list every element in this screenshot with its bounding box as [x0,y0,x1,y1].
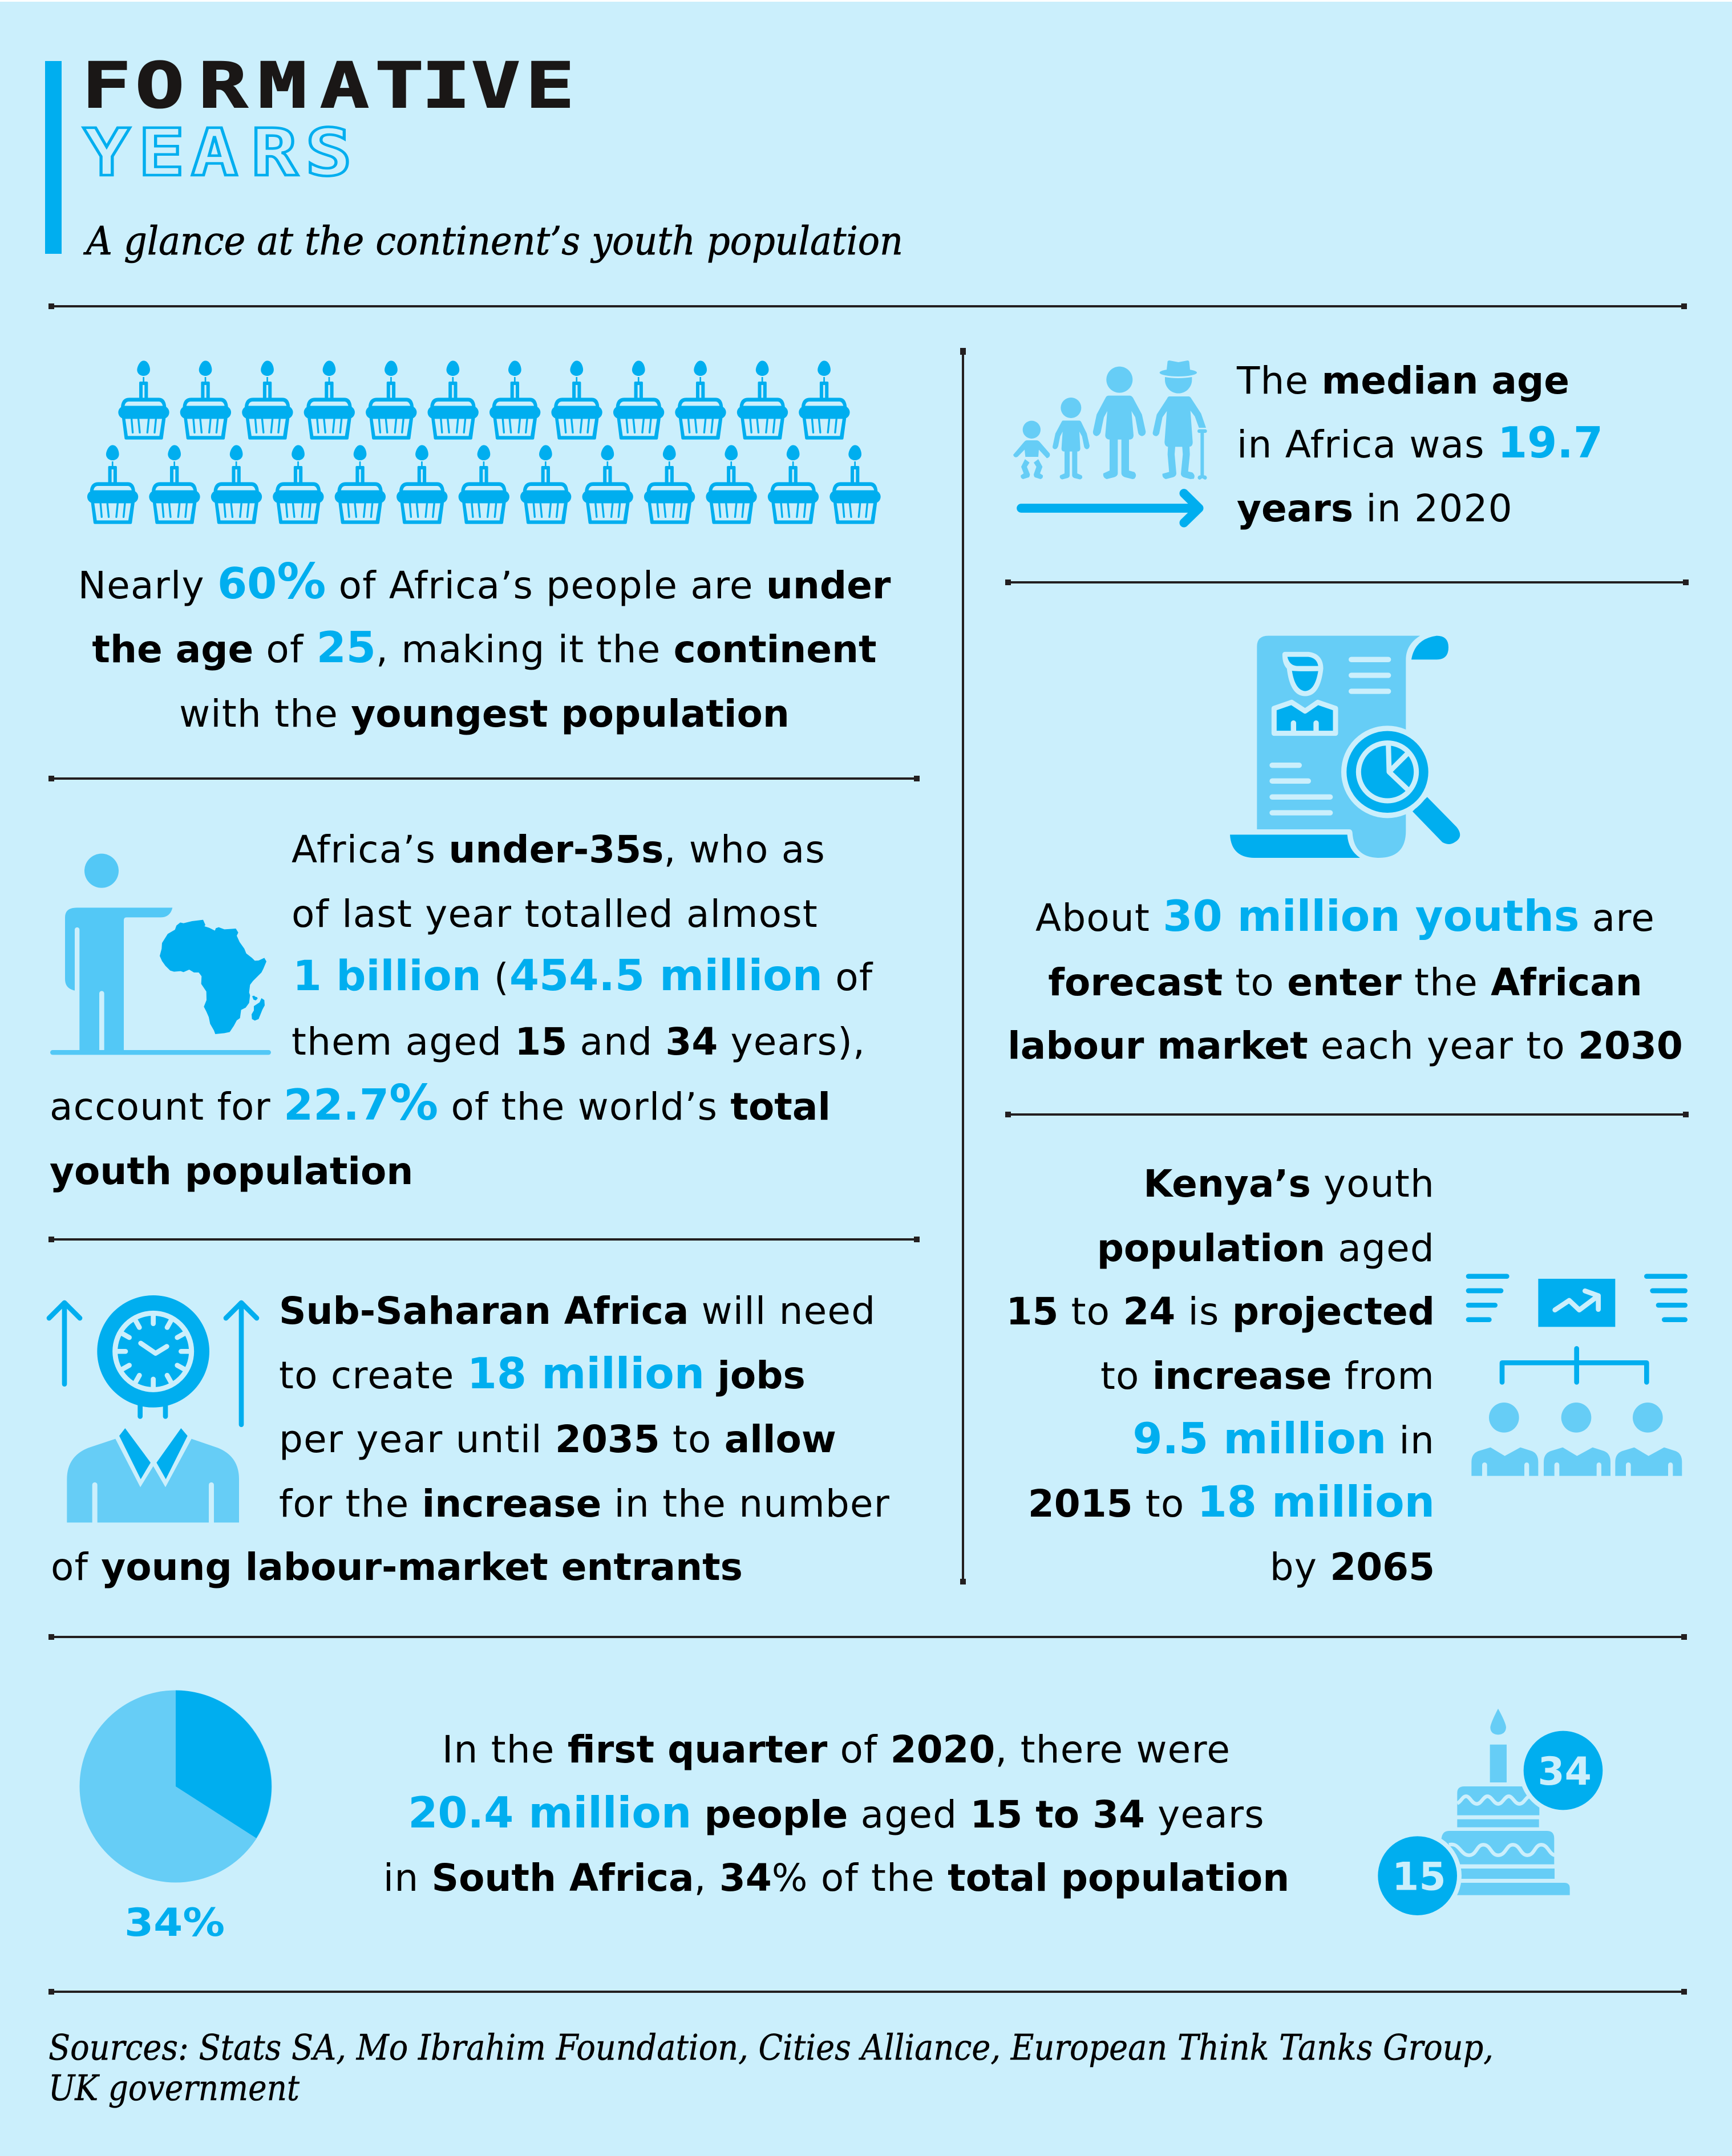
icon: clock-headed worker with rising arrows [49,1295,257,1522]
elder with hat and cane [1153,360,1207,480]
text: median age: in Africa was 19.7 [1237,418,1603,468]
baby [1013,421,1050,479]
text: under-35s: of last year totalled almost [292,892,818,936]
text: Kenya youth: 9.5 million in [1132,1413,1435,1464]
adult [1093,367,1146,479]
profile portrait [1274,654,1336,733]
sources: UK government [48,2067,300,2109]
text: under-35s: 1 billion (454.5 million of [293,950,873,1000]
icon: birthday cake with ages 15 and 34 [1373,1709,1607,1920]
text: 30 million youths: labour market each year to 2030 [1007,1024,1683,1068]
people [1471,1403,1682,1476]
text: sub-Saharan jobs: for the increase in the number [279,1482,890,1526]
sources [48,2027,1494,2109]
clock head [97,1295,209,1416]
page [1257,636,1420,858]
org connector [1502,1348,1646,1382]
pie label: 34% [124,1900,225,1946]
age badge 15: 15 [1392,1854,1446,1899]
text: under-35s: youth population [50,1149,413,1193]
icon: person pointing at Africa [50,854,271,1055]
torso with collar [67,1428,239,1522]
text: Kenya youth: by 2065 [1270,1545,1435,1589]
text: Kenya youth: population aged [1097,1226,1435,1270]
sources: Sources: Stats SA, Mo Ibrahim Foundation, Cities Alliance, European Think Tanks Group, [48,2027,1494,2068]
text: under-35s: Africa’s under-35s, who as [292,828,825,872]
text: sub-Saharan jobs [51,1289,890,1589]
text: sub-Saharan jobs: of young labour-market entrants [51,1545,743,1589]
text: median age: years in 2020 [1237,487,1513,530]
subtitle: A glance at the continent’s youth population [83,219,903,264]
title line: FORMATIVE: FORMATIVE [82,50,574,123]
text: sub-Saharan jobs: per year until 2035 to allow [279,1417,836,1461]
magnifier [1341,726,1460,844]
text: Kenya youth: Kenya’s youth [1143,1162,1435,1206]
text: median age: The median age [1236,359,1569,403]
icon: document with magnifying glass [1230,636,1460,858]
text: Kenya youth [1006,1162,1435,1589]
accent bar [45,61,62,254]
text: under-25 population: with the youngest population [179,692,790,736]
rules [48,303,1689,1995]
map of Africa [160,920,266,1034]
text: South Africa [383,1728,1289,1900]
arrow: age progression [1021,493,1199,523]
text: Kenya youth: to increase from [1100,1354,1435,1398]
text: under-35s: account for 22.7% of the world’s total [50,1075,831,1132]
text: under-25 population [78,553,891,736]
text: South Africa: in South Africa, 34% of the total population [383,1856,1289,1900]
arrow: up left [49,1303,80,1384]
side bars [1468,1276,1685,1320]
title [82,50,574,191]
icon: ages of life with arrow [1013,360,1207,523]
text: under-25 population: the age of 25, making it the continent [92,622,877,672]
text: under-35s [50,828,873,1193]
pie chart: 34% [80,1691,272,1946]
text: South Africa: In the first quarter of 2020, there were [442,1728,1231,1772]
icon: team with growth chart [1468,1276,1685,1476]
text: median age [1236,359,1603,530]
text: Kenya youth: 2015 to 18 million [1028,1477,1435,1527]
icon: rows of birthday cupcakes [87,360,881,524]
age badge 34: 34 [1537,1749,1592,1794]
chart panel [1538,1279,1615,1327]
title line: YEARS: YEARS [83,115,352,191]
text: sub-Saharan jobs: to create 18 million jobs [279,1348,806,1399]
text: under-35s: them aged 15 and 34 years), [292,1020,865,1064]
text: under-25 population: Nearly 60% of Africa’s people are under [78,553,891,610]
arrow: up right [226,1303,257,1425]
text: 30 million youths [1007,891,1683,1068]
text: sub-Saharan jobs: Sub-Saharan Africa will need [279,1289,876,1333]
text: 30 million youths: About 30 million youths are [1035,891,1655,941]
child [1053,398,1090,480]
text: South Africa: 20.4 million people aged 15 to 34 years [408,1788,1265,1838]
text: 30 million youths: forecast to enter the African [1048,961,1642,1004]
text lines [1272,659,1389,813]
text: Kenya youth: 15 to 24 is projected [1006,1290,1435,1334]
